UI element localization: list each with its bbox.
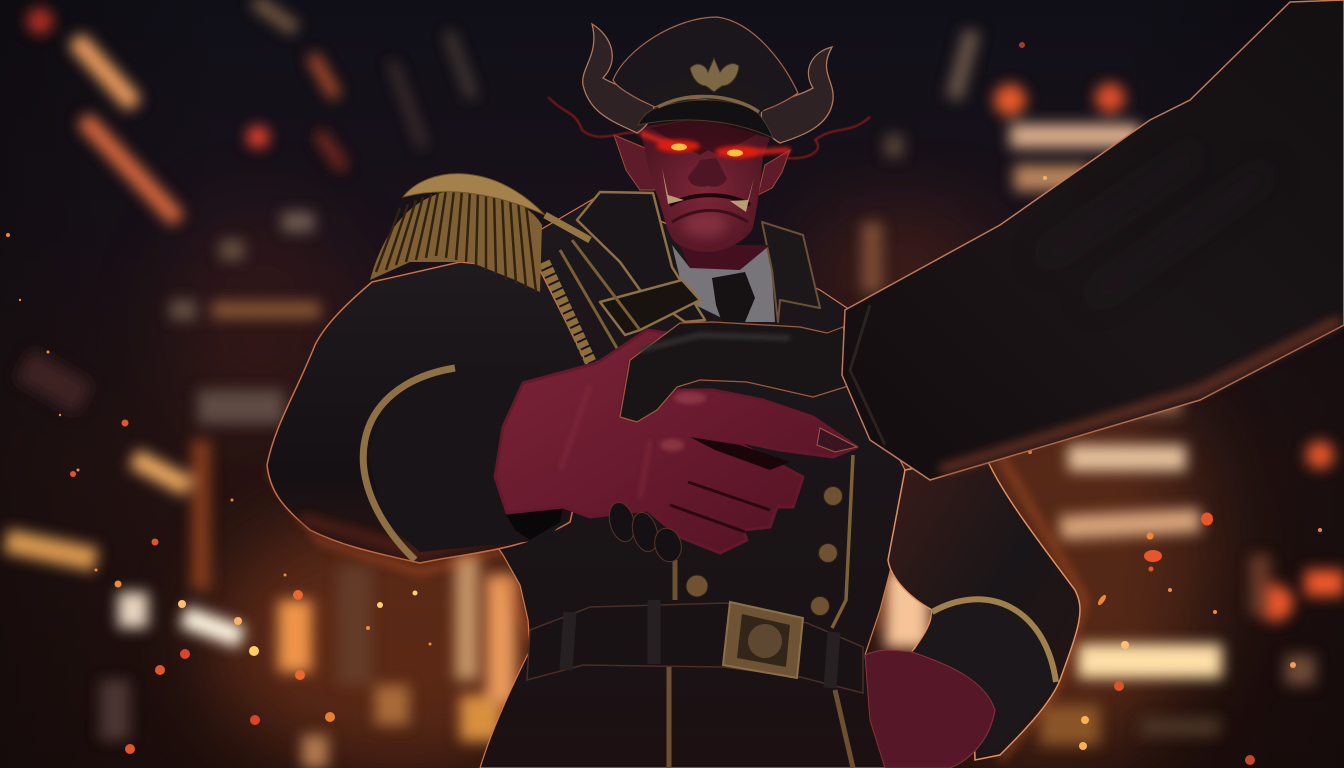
- gold cord: [658, 96, 759, 112]
- belt buckle: [723, 602, 803, 678]
- epaulette dome: [403, 174, 545, 215]
- ears: [614, 135, 655, 190]
- belt loops: [566, 600, 834, 688]
- cuff gold band: [363, 368, 455, 560]
- red hand: [495, 330, 857, 553]
- red smoke wisps: [548, 97, 870, 158]
- figure: coat torso: [400, 195, 905, 768]
- cap crown: [613, 17, 798, 113]
- brow shadow: [650, 118, 765, 155]
- tie: [712, 272, 755, 322]
- coat buttons: [686, 486, 842, 616]
- officer cap: [613, 17, 798, 138]
- figure: hand on hip: [865, 650, 995, 768]
- black glove fingers under hand: [605, 500, 685, 565]
- finger shadows: [670, 482, 770, 532]
- sleeve lower rim light: [940, 320, 1340, 470]
- cuff inner shadow: [505, 507, 563, 540]
- knuckle highlights: [674, 392, 706, 404]
- eye glow: [640, 133, 790, 158]
- figure: right arm on hip: [888, 455, 1080, 760]
- chin highlight: [683, 213, 727, 237]
- face: [640, 118, 770, 252]
- lower lapel gold: [600, 280, 700, 335]
- coat centre seam: [669, 560, 853, 768]
- cap badge: [690, 58, 739, 92]
- epaulette fringe: [370, 190, 542, 292]
- sleeve cuff: [368, 365, 566, 552]
- tusks: [662, 168, 684, 204]
- belt: [527, 600, 863, 693]
- right cuff gold band: [932, 599, 1056, 682]
- epaulette: [370, 174, 545, 292]
- horns: [583, 24, 833, 143]
- mouth: [670, 195, 750, 205]
- fingernail: [817, 428, 857, 452]
- bright glow behind waist: [486, 570, 929, 705]
- braided aiguillette: [544, 215, 640, 365]
- neck: [675, 235, 770, 270]
- cap brim: [638, 100, 773, 138]
- cap band: [642, 77, 772, 115]
- right cuff: [912, 599, 1056, 755]
- figure: raised left arm: [267, 262, 600, 563]
- nose: [688, 158, 727, 187]
- left lapel: [577, 192, 705, 322]
- right lapel: [762, 222, 820, 322]
- head: [548, 97, 870, 270]
- coat front gold piping: [832, 455, 853, 628]
- black glove: [620, 322, 858, 422]
- sleeve lower red light: [300, 518, 555, 553]
- foreground sleeve: [842, 0, 1344, 480]
- lapels and shirt: [577, 192, 820, 335]
- rim glow around figure: [270, 455, 1085, 760]
- shirt: [672, 243, 775, 322]
